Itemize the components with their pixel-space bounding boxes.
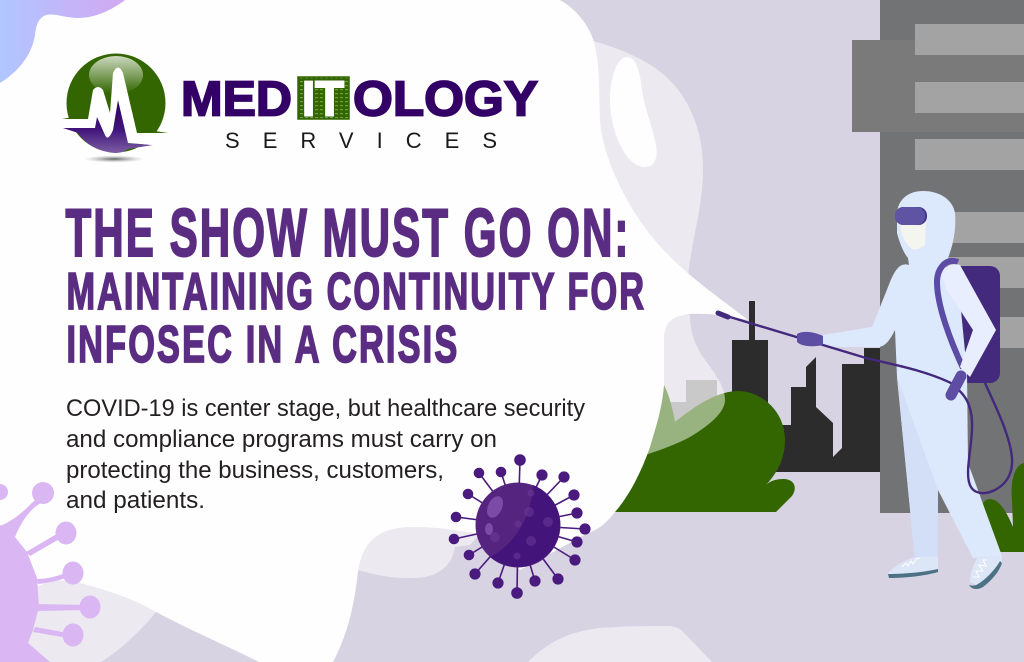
title: MAINTAINING CONTINUITY FOR [66, 263, 644, 321]
intro paragraph: and patients. [66, 487, 205, 514]
distant grey buildings [660, 380, 717, 440]
city skyline [732, 301, 880, 472]
worker in protective suit [718, 191, 1012, 589]
face mask [900, 222, 926, 249]
pale oval highlight [610, 57, 657, 167]
title [66, 195, 644, 374]
spray wand [718, 313, 953, 384]
backpack strap [937, 261, 963, 368]
corner gradient blob [0, 0, 125, 83]
left shoe [888, 557, 938, 578]
right shoe [969, 556, 1002, 589]
suit right arm [942, 264, 996, 377]
logo wordmark: IT [302, 72, 344, 126]
translucent blobs [20, 40, 725, 662]
suit leg shading [897, 377, 938, 560]
logo globe icon [62, 54, 168, 162]
goggles [895, 207, 927, 225]
backpack [950, 266, 1000, 383]
logo wordmark: OLOGY [353, 72, 538, 126]
suit body [823, 191, 1002, 560]
intro paragraph: protecting the business, customers, [66, 457, 444, 484]
logo: Meditology Services [62, 54, 538, 162]
logo wordmark: MED [181, 72, 292, 126]
title: THE SHOW MUST GO ON: [66, 195, 628, 270]
right glove [951, 376, 961, 395]
intro paragraph [66, 395, 585, 514]
intro paragraph: COVID-19 is center stage, but healthcare security [66, 395, 585, 422]
left glove [797, 332, 823, 346]
green bush [600, 383, 795, 512]
logo wordmark [181, 72, 538, 153]
intro paragraph: and compliance programs must carry on [66, 426, 497, 453]
right foreground bush [983, 463, 1024, 552]
logo wordmark: SERVICES [225, 128, 497, 153]
icon: dark purple virus [450, 455, 590, 598]
icon: large pale virus [0, 482, 100, 662]
virus spikes [450, 455, 590, 598]
spray hose [952, 383, 1012, 493]
building [852, 0, 1024, 513]
white blob backdrop [0, 0, 748, 662]
title: INFOSEC IN A CRISIS [66, 316, 457, 374]
